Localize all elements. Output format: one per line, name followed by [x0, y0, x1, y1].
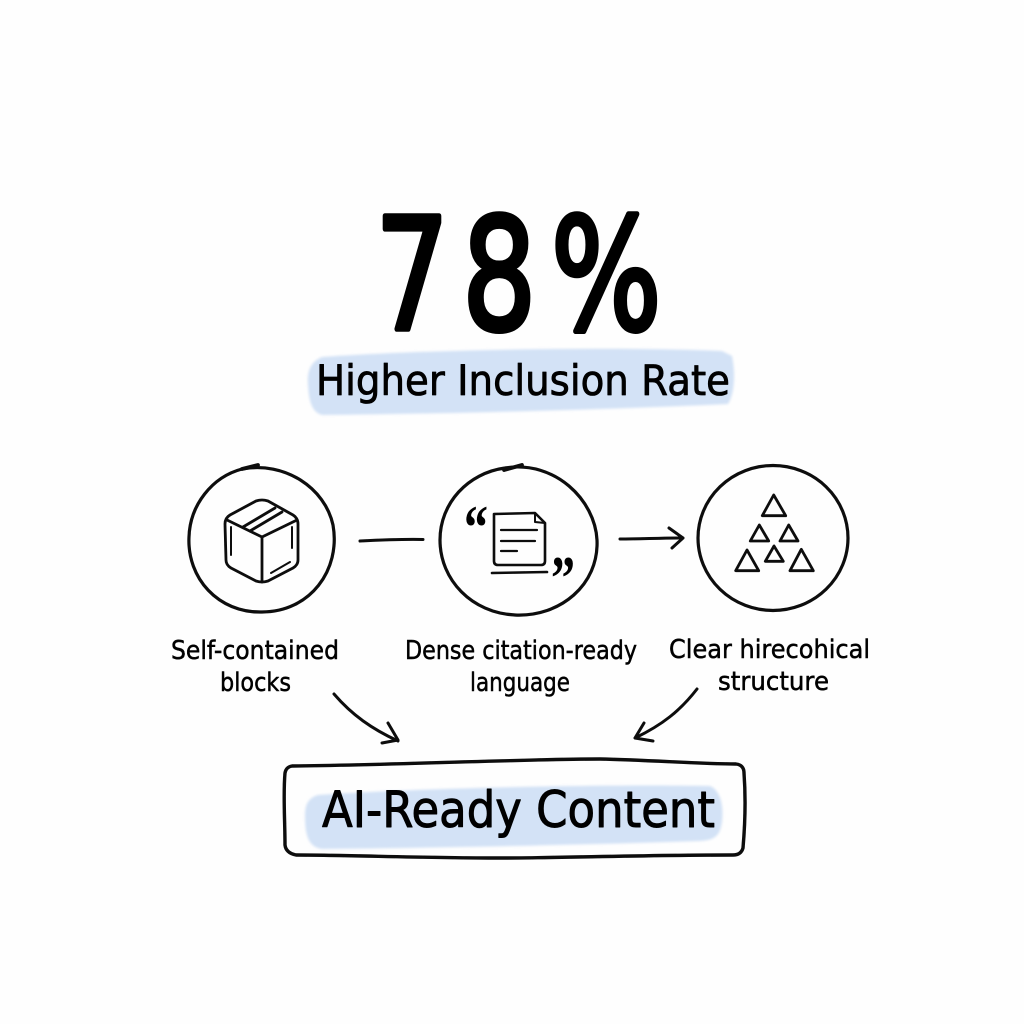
arrow: blocks to AI-ready content: [334, 694, 398, 743]
highlight swash: [305, 785, 722, 849]
panel: dense citation-ready language: [405, 465, 637, 698]
hand-drawn box outline: [284, 759, 745, 858]
icon: document with quote marks: [464, 494, 575, 613]
icon: cardboard box: [225, 500, 298, 582]
panel: self-contained blocks: [171, 465, 339, 698]
subtitle text: Higher Inclusion Rate: [316, 356, 730, 405]
opening quote mark: “: [464, 494, 488, 562]
panel: clear hierarchical structure: [669, 466, 870, 697]
arrow: citation to structure: [620, 528, 683, 548]
label: self-contained blocks: Self-contained: [171, 636, 339, 666]
label: self-contained blocks: blocks: [220, 668, 291, 698]
label: clear hirecohical structure: structure: [718, 667, 829, 697]
closing quote mark: ”: [551, 545, 575, 613]
label: clear hirecohical structure: Clear hirecohical: [669, 635, 870, 665]
label: dense citation-ready language: Dense citation-ready: [405, 636, 637, 666]
arrow: structure to AI-ready content: [635, 689, 697, 741]
label: dense citation-ready language: language: [470, 668, 570, 698]
subtitle with blue highlight: [308, 349, 734, 415]
label: dense citation-ready language: [405, 636, 637, 698]
headline stat: 78%: 78%: [375, 186, 661, 366]
label: clear hirecohical structure: [669, 635, 870, 697]
result box: AI-Ready Content: [284, 759, 745, 858]
circle outline 3: [698, 466, 848, 610]
connector line: [360, 539, 423, 541]
circle outline 2: [440, 465, 597, 615]
label: self-contained blocks: [171, 636, 339, 698]
icon: triangle cluster: [736, 495, 813, 571]
highlight swash: [308, 349, 734, 415]
circle outline 1: [189, 465, 334, 612]
box text: AI-Ready Content: [322, 781, 715, 839]
